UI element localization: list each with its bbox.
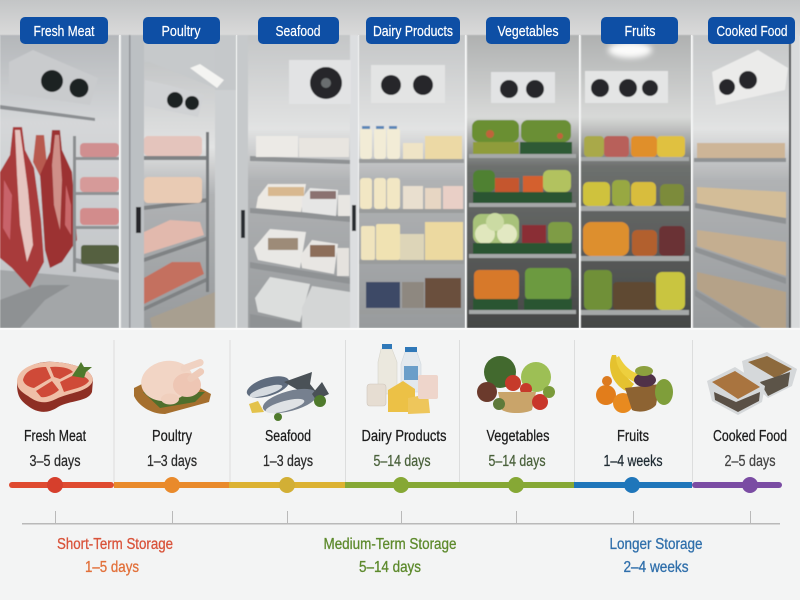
icon: roast chicken on board [134,357,211,414]
label: seafood [258,17,339,44]
label: cooked food [708,17,795,44]
label: fruits: Fruits [624,23,656,40]
fruit shelves [581,136,689,315]
item: poultry [147,428,197,470]
item: fruits: 1–4 weeks [604,453,663,470]
item: seafood: 1–3 days [263,453,313,470]
storage tier: longer: Longer Storage [610,536,703,553]
storage tier: short-term: 1–5 days [85,559,139,576]
item: vegetables: 5–14 days [488,453,546,470]
evaporator unit [145,80,204,117]
item: fresh meat [24,428,87,470]
label: fresh meat: Fresh Meat [34,23,95,40]
storage tier: short-term [57,536,173,576]
photo panel: seafood [237,35,358,328]
icon: vegetable basket [477,356,555,413]
photo panel: fruits [581,35,691,328]
item: poultry: Poultry [152,428,192,445]
photo panel: poultry [121,35,236,328]
label: poultry [143,17,220,44]
label: vegetables [486,17,570,44]
bottom panel background [0,328,800,600]
category labels [20,17,795,44]
poultry shelves [144,132,209,311]
icon: meal prep containers [707,352,797,415]
vegetable shelves [469,120,576,314]
item: cooked food: 2–5 days [724,453,776,470]
evaporator unit [371,65,445,103]
seafood shelves [250,136,350,328]
photo panel: vegetables [467,35,579,328]
cooked food shelves [694,143,786,328]
storage tier: medium-term: 5–14 days [359,559,421,576]
item: cooked food [713,428,787,470]
item: seafood [263,428,313,470]
ceiling light [190,64,224,88]
icon: dairy products [367,344,438,414]
storage tier: longer [610,536,703,576]
icon: fruit basket [596,355,673,413]
label: vegetables: Vegetables [498,23,558,40]
item: fruits: Fruits [617,428,649,445]
storage tier: medium-term: Medium-Term Storage [324,536,457,553]
storage tier: medium-term [324,536,457,576]
meat shelves [73,136,119,273]
column dividers [114,340,693,482]
photo panel: dairy products [359,35,465,328]
icon: fish [244,372,329,421]
item: dairy products: 5–14 days [374,453,431,470]
item: seafood: Seafood [265,428,311,445]
label: seafood: Seafood [276,23,320,40]
item labels and durations [24,428,787,470]
hanging carcasses [0,127,77,288]
dairy shelves [359,126,464,314]
photo panel: fresh meat [0,35,119,328]
item: vegetables: Vegetables [486,428,550,445]
evaporator unit [712,50,788,105]
item: fresh meat: 3–5 days [30,453,81,470]
label: dairy products [366,17,460,44]
evaporator unit [585,71,668,103]
photo panel: cooked food [693,35,800,328]
storage tier: short-term: Short-Term Storage [57,536,173,553]
item: fresh meat: Fresh Meat [24,428,87,445]
storage tier: longer: 2–4 weeks [624,559,688,576]
door handle [136,207,141,233]
label: fruits [601,17,678,44]
top ceiling band [0,0,800,36]
item: fruits [604,428,663,470]
item: dairy products: Dairy Products [362,428,447,445]
storage scale line [22,511,780,524]
label: fresh meat [20,17,108,44]
evaporator unit [491,72,555,103]
label: poultry: Poultry [162,23,201,40]
evaporator unit [289,60,351,104]
label: dairy products: Dairy Products [373,23,453,40]
item: vegetables [486,428,550,470]
item: poultry: 1–3 days [147,453,197,470]
evaporator unit [9,50,98,105]
icon: steak [17,362,93,412]
item: dairy products [362,428,447,470]
timeline bar [9,477,782,493]
